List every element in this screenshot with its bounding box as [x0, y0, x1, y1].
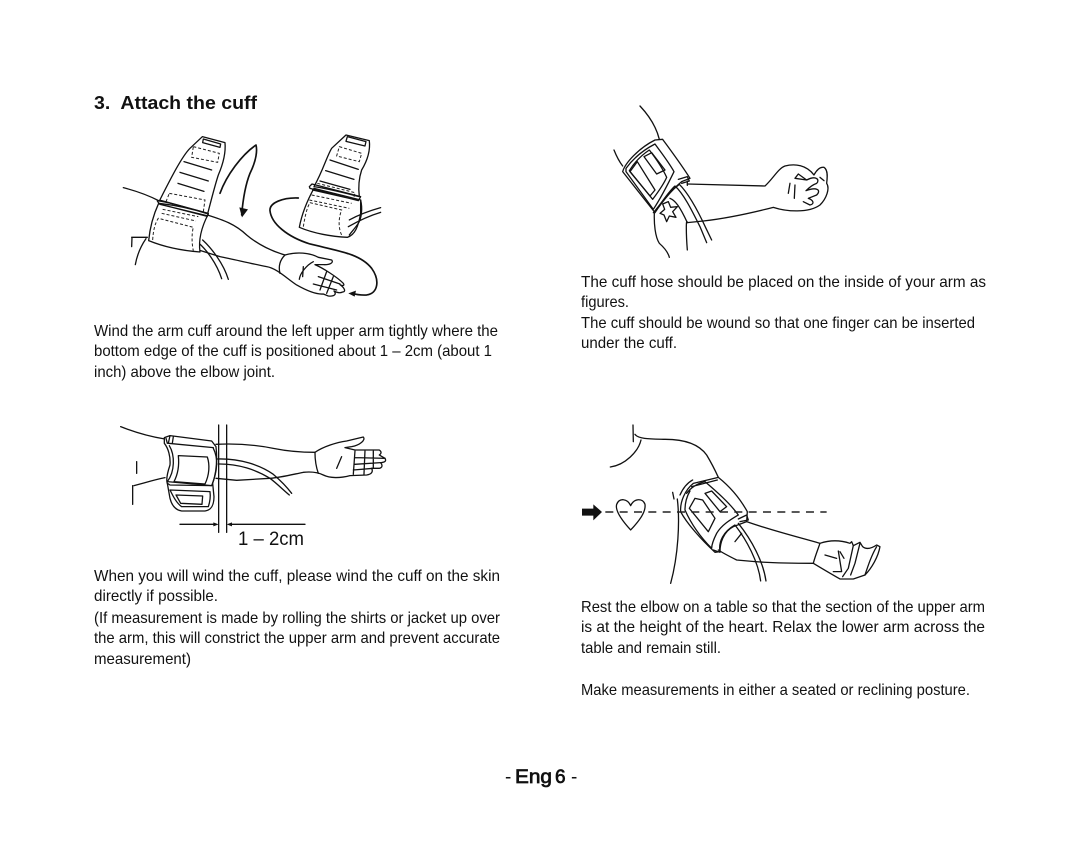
title: 3. Attach the cuff — [94, 93, 258, 113]
text block: wind on the skin — [94, 568, 501, 668]
figure: wrapping the cuff around the arm — [123, 135, 381, 297]
text block: posture: Make measurements in either a seated or reclining posture. — [581, 682, 970, 699]
text block: wind on the skin: measurement) — [94, 651, 191, 668]
figure: elbow at heart height — [582, 425, 880, 583]
text block: wind the arm cuff — [94, 323, 498, 381]
page number: - — [571, 767, 577, 788]
figure: cuff position above the elbow, 1 to 2cm — [121, 425, 386, 532]
text block: wind the arm cuff: Wind the arm cuff around the left upper arm tightly where the — [94, 323, 498, 340]
text block: wind the arm cuff: inch) above the elbow joint. — [94, 364, 275, 381]
text block: cuff hose placement — [581, 274, 986, 352]
text block: wind on the skin: directly if possible. — [94, 588, 218, 605]
text block: cuff hose placement: under the cuff. — [581, 335, 677, 352]
page number: Eng — [515, 767, 552, 788]
page number — [505, 767, 577, 788]
text block: rest the elbow: is at the height of the heart. Relax the lower arm across the — [581, 619, 985, 636]
text block: wind on the skin: When you will wind the cuff, please wind the cuff on the skin — [94, 568, 500, 585]
text block: cuff hose placement: The cuff hose should be placed on the inside of your arm as — [581, 274, 986, 291]
text block: wind the arm cuff: bottom edge of the cuff is positioned about 1 – 2cm (about 1 — [94, 343, 492, 360]
figure: holding the cuff in place — [614, 106, 828, 257]
text block: cuff hose placement: figures. — [581, 294, 629, 311]
text block: wind on the skin: (If measurement is made by rolling the shirts or jacket up over — [94, 610, 501, 627]
text block: rest the elbow: table and remain still. — [581, 640, 721, 657]
dimension label: 1 – 2cm: 1 – 2cm — [238, 529, 304, 550]
text block: rest the elbow — [581, 599, 985, 657]
text block: cuff hose placement: The cuff should be wound so that one finger can be inserted — [581, 315, 975, 332]
text block: rest the elbow: Rest the elbow on a table so that the section of the upper arm — [581, 599, 985, 616]
page number: - — [505, 767, 511, 788]
page number: 6 — [555, 767, 566, 788]
text block: wind on the skin: the arm, this will constrict the upper arm and prevent accurate — [94, 630, 500, 647]
